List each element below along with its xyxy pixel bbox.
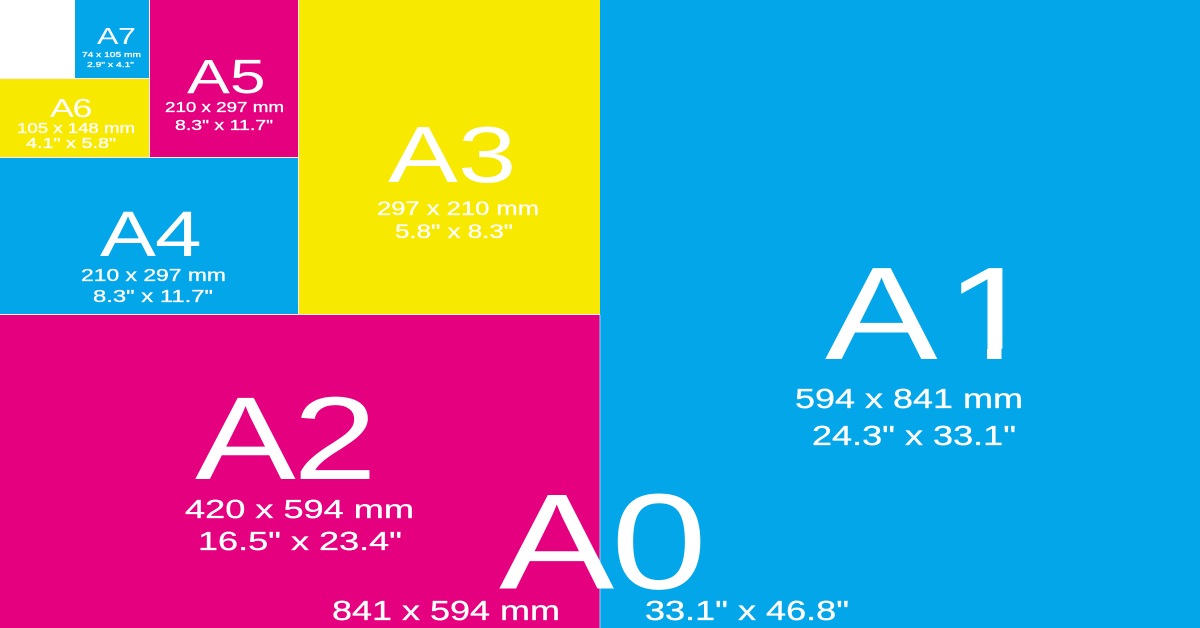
panel: A6	[0, 79, 149, 157]
A1 inches: 24.3" x 33.1"	[812, 420, 1016, 451]
panel: A5	[150, 0, 298, 157]
A0 inches: 33.1" x 46.8"	[645, 595, 849, 626]
A6 inches: 4.1" x 5.8"	[26, 136, 116, 152]
A2 heading: A	[195, 372, 296, 504]
A7 inches: 2.9" x 4.1"	[87, 60, 134, 69]
A4 heading: 4	[155, 198, 202, 270]
A4 inches: 8.3" x 11.7"	[93, 286, 213, 306]
panel: A7	[75, 0, 149, 78]
A0 millimetres: 841 x 594 mm	[332, 595, 560, 626]
A1 heading	[825, 241, 1039, 388]
panel: A1	[600, 0, 1200, 628]
A2 millimetres: 420 x 594 mm	[185, 494, 414, 524]
A3 heading: A	[388, 110, 458, 199]
empty white corner	[0, 0, 75, 78]
panel: A2	[0, 315, 600, 628]
A4 heading: A	[100, 198, 156, 270]
A6 heading: A	[50, 94, 74, 123]
A6 heading: 6	[72, 94, 92, 123]
A0 heading: A	[499, 465, 614, 617]
A3 millimetres: 297 x 210 mm	[377, 198, 539, 220]
A1 heading: 1	[945, 241, 1039, 388]
A0 heading: 0	[611, 465, 707, 617]
panel: A4	[0, 158, 298, 314]
A2 inches: 16.5" x 23.4"	[198, 526, 402, 556]
panel: A0 label	[332, 465, 849, 626]
A7 heading: 7	[118, 23, 136, 49]
A1 millimetres: 594 x 841 mm	[795, 383, 1023, 414]
A5 inches: 8.3" x 11.7"	[175, 118, 273, 134]
A7 millimetres: 74 x 105 mm	[82, 50, 141, 59]
panel: A3	[299, 0, 600, 314]
A4 millimetres: 210 x 297 mm	[81, 265, 226, 285]
A7 heading: A	[97, 23, 118, 49]
A5 heading: A	[187, 51, 230, 104]
A6 millimetres: 105 x 148 mm	[17, 121, 135, 137]
A5 heading: 5	[230, 51, 266, 104]
A2 heading: 2	[293, 372, 377, 504]
A3 inches: 5.8" x 8.3"	[395, 221, 513, 243]
A3 heading: 3	[458, 110, 516, 199]
A5 millimetres: 210 x 297 mm	[165, 100, 284, 116]
A1 heading: A	[825, 241, 938, 388]
